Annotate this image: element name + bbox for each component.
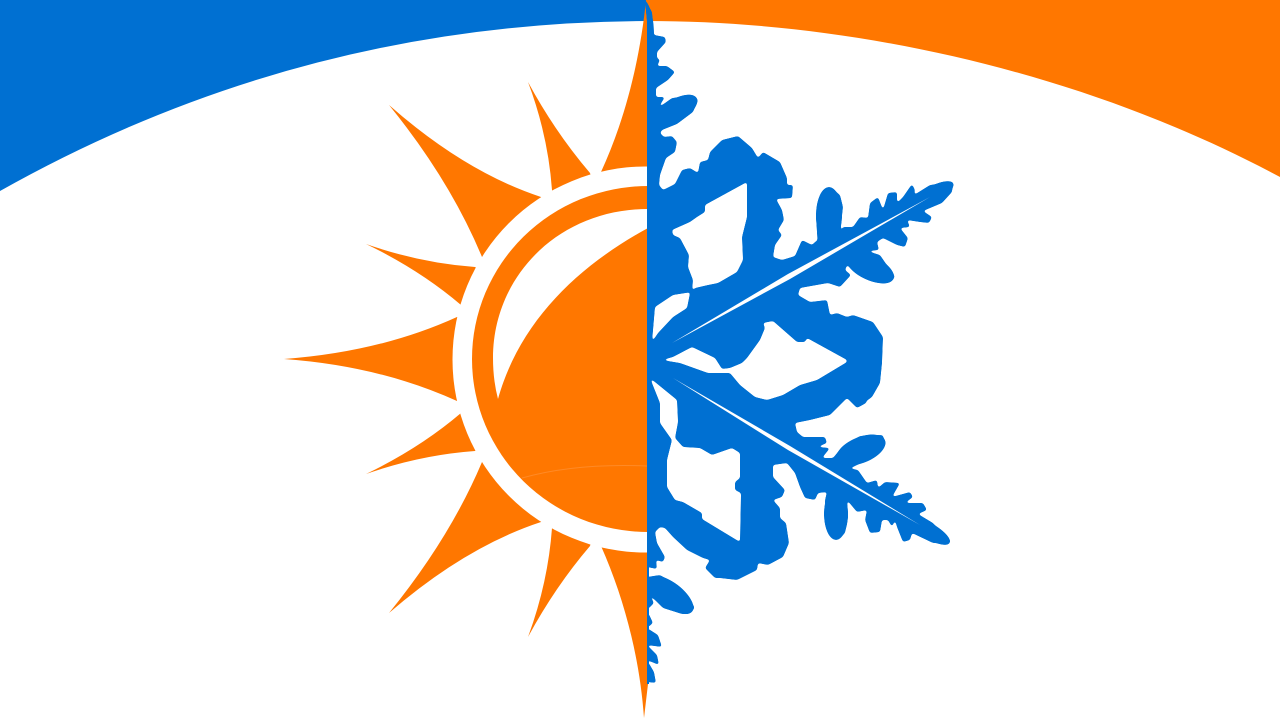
snowflake spine: [645, 0, 654, 684]
sun half: [284, 0, 838, 718]
snowflake half: [642, 0, 957, 684]
blue arc band, top left: [0, 0, 647, 191]
upper arm highlight: [672, 197, 930, 343]
white ring gap around sun: [452, 166, 838, 552]
faint disc contour line: [522, 466, 647, 478]
sun rays: [284, 0, 648, 718]
snowflake silhouette with leaves: [642, 0, 957, 684]
sun disc: [472, 186, 648, 532]
orange arc band, top right: [647, 0, 1280, 177]
white crescent highlight: [493, 209, 648, 399]
lower arm highlight: [673, 378, 920, 525]
